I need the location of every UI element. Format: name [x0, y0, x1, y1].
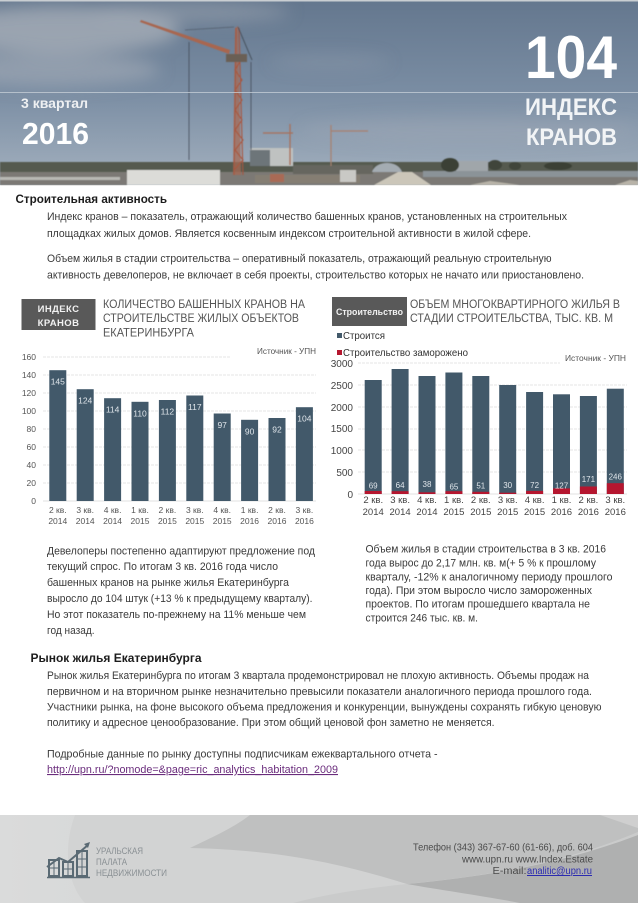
- stacked bar chart: housing by quarter: 30: [503, 481, 513, 490]
- stacked bar chart: housing by quarter: 2015: [443, 507, 464, 518]
- text block: index definition: Индекс кранов – показатель, отражающий количество башенных кранов, установленных на строительных: [47, 211, 567, 223]
- stacked bar chart: housing by quarter: 2014: [363, 507, 384, 518]
- header: title index of cranes: [525, 94, 617, 151]
- header: title index of cranes: КРАНОВ: [526, 124, 617, 151]
- text block: housing market: [47, 670, 602, 760]
- chart heading: number of tower cranes: СТРОИТЕЛЬСТВЕ ЖИЛЫХ ОБЪЕКТОВ: [103, 313, 299, 325]
- bar chart: cranes by quarter: 3 кв.: [76, 505, 94, 515]
- icon: distant cranes: [263, 124, 368, 166]
- stacked bar chart: housing by quarter: 2014: [390, 507, 411, 518]
- stacked bar chart: housing by quarter: 1000: [331, 446, 353, 457]
- stacked bar chart: housing by quarter: 64: [396, 481, 405, 490]
- bar chart: cranes by quarter: 40: [27, 460, 36, 470]
- heading: housing market: Рынок жилья Екатеринбурга: [30, 651, 202, 665]
- text block: developers commentary: текущий спрос. По итогам 3 кв. 2016 года число: [47, 561, 278, 573]
- chart heading: volume of housing: [410, 299, 620, 325]
- badge: index of cranes: КРАНОВ: [38, 318, 79, 329]
- stacked bar chart: housing by quarter: 3 кв.: [498, 495, 518, 506]
- bar chart: cranes by quarter: 2015: [158, 516, 177, 526]
- stacked bar chart: housing by quarter: 51: [476, 482, 486, 490]
- panel: housing under construction chart: [331, 297, 627, 518]
- stacked bar chart: housing by quarter: 2014: [416, 507, 438, 518]
- bar chart: cranes by quarter: 0: [31, 496, 36, 506]
- bar chart: cranes by quarter: 1 кв.: [241, 505, 258, 515]
- header photo: construction site with cranes: [0, 0, 638, 185]
- chart heading: number of tower cranes: [103, 299, 305, 340]
- bar chart: cranes by quarter: 124: [78, 396, 93, 406]
- bar chart: cranes by quarter: 97: [217, 420, 227, 430]
- bar chart: cranes by quarter: 3 кв.: [186, 505, 204, 515]
- stacked bar chart: housing by quarter: 0: [347, 490, 353, 501]
- stacked bar chart: housing by quarter: 69: [369, 481, 378, 490]
- bar chart: cranes by quarter: 4 кв.: [213, 505, 231, 515]
- bar chart: cranes by quarter: 104: [297, 414, 312, 424]
- bar chart: cranes by quarter: 110: [133, 408, 147, 418]
- heading: construction activity: Строительная активность: [16, 192, 167, 206]
- stacked bar chart: housing by quarter: 2 кв.: [471, 495, 491, 506]
- footer contacts: www.upn.ru www.Index.Estate: [461, 854, 593, 866]
- text block: index definition: [47, 211, 584, 282]
- stacked bar chart: housing by quarter: 1 кв.: [552, 495, 571, 506]
- stacked bar chart: housing by quarter: 2016: [551, 507, 572, 518]
- text block: developers commentary: Девелоперы постепенно адаптируют предложение под: [47, 546, 316, 558]
- stacked bar chart: housing by quarter: 72: [530, 481, 540, 490]
- bar chart: cranes by quarter: 60: [27, 442, 36, 452]
- bar chart: cranes by quarter: 2015: [131, 516, 150, 526]
- stacked bar chart: housing by quarter: 2015: [524, 507, 545, 518]
- stacked bar chart: housing by quarter: 2000: [331, 403, 353, 414]
- stacked bar chart: housing by quarter: 1500: [331, 424, 353, 435]
- legend: Строительство заморожено: [343, 347, 468, 359]
- bar chart: cranes by quarter: 160: [22, 352, 36, 362]
- text block: developers commentary: год назад.: [47, 625, 94, 637]
- badge: construction: [332, 297, 407, 326]
- icon: main tower crane: [140, 20, 252, 175]
- stacked bar chart: housing by quarter: 127: [555, 482, 569, 490]
- footer contacts: [413, 842, 593, 877]
- legend: Строится: [343, 330, 385, 342]
- header: title index of cranes: ИНДЕКС: [525, 94, 617, 121]
- bar chart: cranes by quarter: 2015: [185, 516, 205, 526]
- bar chart: cranes by quarter: 2 кв.: [49, 505, 67, 515]
- footer contacts: E-mail:: [492, 866, 526, 877]
- logo: Ural real estate chamber: НЕДВИЖИМОСТИ: [96, 868, 167, 879]
- bar chart: cranes by quarter: 114: [106, 405, 120, 415]
- text block: developers commentary: выросло до 104 штук (+13 % к предыдущему кварталу).: [47, 593, 312, 605]
- text block: housing market: политику и адресное ценообразование. При этом общий ценовой фон заметно не меняется.: [47, 717, 494, 729]
- panel: crane index chart: [22, 299, 316, 526]
- header: year: 2016: [22, 116, 89, 151]
- badge: index of cranes: [22, 299, 96, 330]
- stacked bar chart: housing by quarter: 3 кв.: [390, 495, 410, 506]
- stacked bar chart: housing by quarter: 2 кв.: [363, 495, 383, 506]
- stacked bar chart: housing by quarter: 65: [449, 482, 459, 492]
- source note: Источник - УПН: [257, 346, 316, 356]
- chart heading: number of tower cranes: КОЛИЧЕСТВО БАШЕННЫХ КРАНОВ НА: [103, 299, 305, 311]
- bar chart: cranes by quarter: 120: [22, 388, 36, 398]
- bar chart: cranes by quarter: 140: [22, 370, 36, 380]
- stacked bar chart: housing by quarter: 2016: [605, 507, 626, 518]
- stacked bar chart: housing by quarter: 2015: [470, 507, 491, 518]
- bar chart: cranes by quarter: 4 кв.: [104, 505, 121, 515]
- text block: housing volume commentary: строится 246 тыс. кв. м.: [366, 612, 478, 624]
- footer contacts: analitic@upn.ru: [527, 866, 592, 877]
- text block: housing volume commentary: года вырос до 2,17 млн. кв. м(+ 5 % к прошлому: [366, 558, 596, 570]
- chart heading: volume of housing: ОБЪЕМ МНОГОКВАРТИРНОГО ЖИЛЬЯ В: [410, 299, 620, 311]
- text block: housing volume commentary: года). При этом выросло число замороженных: [366, 585, 592, 597]
- bar chart: cranes by quarter: 2014: [48, 516, 68, 526]
- stacked bar chart: housing by quarter: 4 кв.: [417, 495, 437, 506]
- legend: [337, 330, 468, 359]
- text block: housing volume commentary: проектов. По итогам прошедшего квартала не: [366, 598, 590, 610]
- bar chart: cranes by quarter: 2 кв.: [159, 505, 176, 515]
- footer contacts: Телефон (343) 367-67-60 (61-66), доб. 604: [413, 842, 593, 854]
- text block: housing volume commentary: кварталу, -12% к аналогичному периоду прошлого: [366, 572, 612, 584]
- bar chart: cranes by quarter: 117: [188, 402, 202, 412]
- badge: index of cranes: ИНДЕКС: [38, 304, 79, 315]
- stacked bar chart: housing by quarter: 2016: [578, 507, 599, 518]
- bar chart: cranes by quarter: 2015: [213, 516, 232, 526]
- text block: housing market: Подробные данные по рынку доступны подписчикам ежеквартального отчета -: [47, 748, 438, 760]
- text block: developers commentary: [47, 546, 316, 637]
- stacked bar chart: housing by quarter: 1 кв.: [444, 495, 464, 506]
- bar chart: cranes by quarter: 92: [272, 424, 282, 434]
- bar chart: cranes by quarter: 20: [27, 478, 36, 488]
- stacked bar chart: housing by quarter: 3 кв.: [605, 495, 625, 506]
- source note: Источник - УПН: [565, 353, 626, 363]
- logo: Ural real estate chamber: УРАЛЬСКАЯ: [96, 846, 143, 857]
- stacked bar chart: housing by quarter: 246: [609, 472, 623, 482]
- text block: housing volume commentary: [366, 544, 612, 624]
- text block: developers commentary: Но этот показатель по-прежнему на 11% меньше чем: [47, 609, 306, 621]
- bar chart: cranes by quarter: 2016: [268, 516, 287, 526]
- stacked bar chart: housing by quarter: 2500: [331, 381, 353, 392]
- stacked bar chart: housing by quarter: [331, 359, 627, 518]
- bar chart: cranes by quarter: 90: [245, 426, 255, 436]
- link: analytics page: http://upn.ru/?nomode=&page=ric_analytics_habitation_2009: [47, 764, 338, 776]
- bar chart: cranes by quarter: 2016: [240, 516, 259, 526]
- text block: index definition: Объем жилья в стадии строительства – оперативный показатель, отражающий реальную строительную: [47, 253, 552, 265]
- text block: index definition: площадках жилых домов. Является косвенным индексом строительной активности в жилой сфере.: [47, 228, 531, 240]
- bar chart: cranes by quarter: 145: [51, 377, 65, 387]
- badge: construction: Строительство: [336, 307, 403, 318]
- text block: housing volume commentary: Объем жилья в стадии строительства в 3 кв. 2016: [366, 544, 606, 556]
- bar chart: cranes by quarter: [22, 352, 316, 526]
- icon: buildings with rising arrow: [47, 842, 90, 878]
- text block: housing market: первичном и на вторичном рынке незначительно превысили показатели аналогичного периода прошлого года.: [47, 686, 592, 698]
- bar chart: cranes by quarter: 80: [27, 424, 36, 434]
- header: quarter label: 3 квартал: [21, 95, 88, 111]
- bar chart: cranes by quarter: 2014: [76, 516, 95, 526]
- logo: Ural real estate chamber: [47, 842, 167, 879]
- text block: housing market: Рынок жилья Екатеринбурга по итогам 3 квартала продемонстрировал не плохую активность. Объемы продаж на: [47, 670, 590, 682]
- text block: index definition: активность девелоперов, не включает в себя проекты, строительство которых не начато или приостановлено.: [47, 270, 584, 282]
- bar chart: cranes by quarter: 2014: [103, 516, 122, 526]
- footer band: [0, 815, 638, 903]
- logo: Ural real estate chamber: ПАЛАТА: [96, 857, 128, 868]
- bar chart: cranes by quarter: 112: [161, 406, 174, 416]
- stacked bar chart: housing by quarter: 2015: [497, 507, 518, 518]
- stacked bar chart: housing by quarter: 4 кв.: [525, 495, 544, 506]
- chart heading: volume of housing: СТАДИИ СТРОИТЕЛЬСТВА, ТЫС. КВ. М: [410, 313, 613, 325]
- stacked bar chart: housing by quarter: 38: [423, 480, 432, 489]
- bar chart: cranes by quarter: 1 кв.: [131, 505, 149, 515]
- text block: developers commentary: башенных кранов на рынке жилья Екатеринбурга: [47, 577, 290, 589]
- text block: housing market: Участники рынка, на фоне высокого объема предложения и конкуренции, вынуждены сохранять гибкую ценовую: [47, 702, 602, 714]
- bar chart: cranes by quarter: 100: [22, 406, 36, 416]
- bar chart: cranes by quarter: 2016: [295, 516, 314, 526]
- stacked bar chart: housing by quarter: 2 кв.: [579, 495, 598, 506]
- stacked bar chart: housing by quarter: 3000: [331, 359, 353, 370]
- stacked bar chart: housing by quarter: 500: [336, 468, 353, 479]
- bar chart: cranes by quarter: 2 кв.: [268, 505, 286, 515]
- chart heading: number of tower cranes: ЕКАТЕРИНБУРГА: [103, 328, 194, 340]
- bar chart: cranes by quarter: 3 кв.: [296, 505, 313, 515]
- stacked bar chart: housing by quarter: 171: [582, 475, 596, 484]
- header: big number 104: 104: [525, 24, 618, 91]
